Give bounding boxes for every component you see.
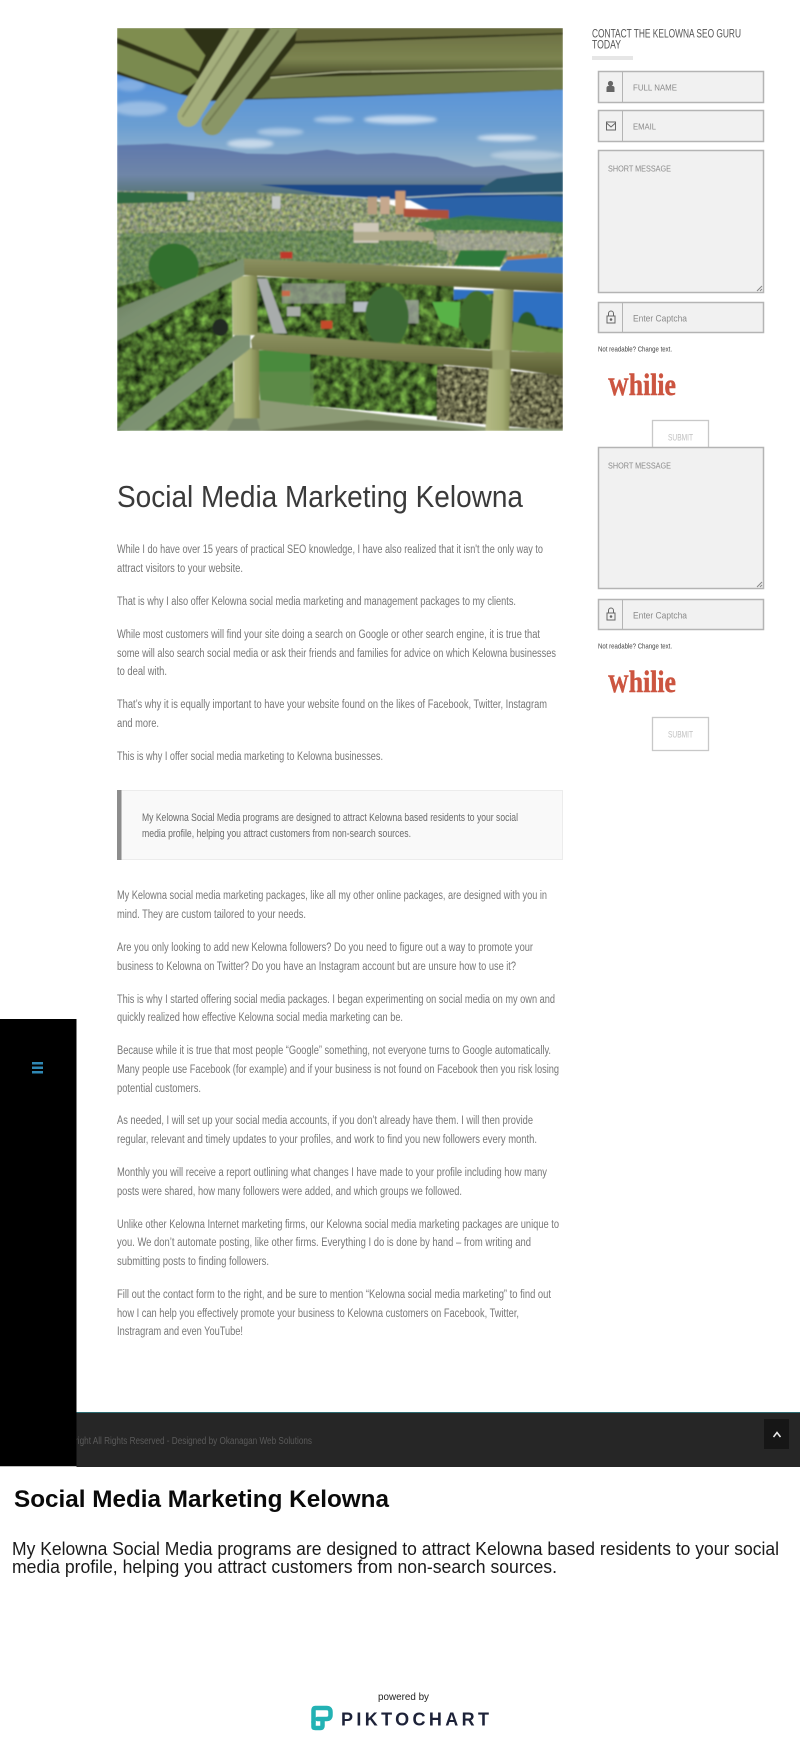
field: short message: [598, 150, 764, 292]
callout: blockquote: [117, 790, 562, 860]
roof top beam: [295, 28, 563, 41]
captcha image: Whilie: [608, 367, 676, 402]
icon: envelope: [606, 122, 616, 130]
field: short message repeat: [598, 448, 764, 588]
far mountains: [117, 144, 563, 200]
left top rail: [117, 258, 244, 341]
body paragraphs: Are you only looking to add new Kelowna followers? Do you need to figure out a way to promote your: [117, 942, 533, 954]
left lower rail: [117, 335, 250, 431]
body paragraphs: mind. They are custom tailored to your needs.: [117, 909, 306, 921]
neighbourhood and trees centre: [257, 277, 563, 357]
icon: lock repeat: [607, 608, 615, 620]
sidebar: contact form: [592, 28, 764, 750]
intro paragraphs: That is why I also offer Kelowna social media marketing and management packages to my clients.: [117, 596, 516, 608]
houses: [149, 243, 563, 353]
field: full name: FULL NAME: [633, 82, 677, 92]
intro paragraphs: attract visitors to your website.: [117, 563, 243, 575]
downtown towers: [188, 191, 449, 219]
body paragraphs: business to Kelowna on Twitter? Do you have an Instagram account but are unsure how to use it?: [117, 961, 516, 973]
roof lower log: [252, 70, 563, 99]
body paragraphs: quickly realized how effective Kelowna social media marketing can be.: [117, 1012, 403, 1024]
left railing post: [232, 275, 260, 418]
rear mid rail: [251, 333, 563, 376]
clouds: [114, 79, 564, 160]
lower description: [12, 1538, 779, 1577]
body paragraphs: [117, 890, 559, 1338]
body paragraphs: Fill out the contact form to the right, and be sure to mention “Kelowna social media marketing” to find out: [117, 1289, 552, 1301]
icon: menu: [32, 1062, 43, 1074]
field: short message repeat: SHORT MESSAGE: [608, 460, 671, 470]
logo wordmark: PIKTOCHART: [341, 1710, 489, 1730]
intro paragraphs: This is why I offer social media marketing to Kelowna businesses.: [117, 751, 383, 763]
intro paragraphs: to deal with.: [117, 666, 167, 678]
title underline: [592, 56, 633, 60]
main heading: Social Media Marketing Kelowna: [117, 479, 524, 514]
submit button repeat: SUBMIT: [668, 730, 693, 740]
roof left log lower: [117, 44, 199, 94]
intro paragraphs: That’s why it is equally important to have your website found on the likes of Facebook, Twitter, Instagram: [117, 699, 547, 711]
body paragraphs: you. We don’t automate posting, like other firms. Everything I do is done by hand – from writing and: [117, 1237, 531, 1249]
photo: Kelowna view from lookout: [117, 28, 563, 431]
body paragraphs: As needed, I will set up your social media accounts, if you don’t already have them. I will then provide: [117, 1115, 533, 1127]
intro paragraphs: some will also search social media or ask their friends and families for advice on which Kelowna businesses: [117, 648, 556, 660]
powered by credit: [314, 1691, 489, 1730]
town tree belts: [117, 192, 563, 287]
intro paragraphs: and more.: [117, 718, 159, 730]
submit button: SUBMIT: [668, 432, 693, 442]
site footer bar: [0, 1412, 800, 1467]
dry hillside scrub: [437, 365, 563, 431]
bay water behind railing: [500, 257, 563, 277]
intro paragraphs: [117, 544, 556, 763]
deck boards: [206, 400, 563, 431]
callout: blockquote: My Kelowna Social Media programs are designed to attract Kelowna based residents to your social: [142, 812, 518, 824]
lawn shading: [257, 372, 314, 405]
field: captcha repeat: [598, 600, 764, 630]
intro paragraphs: While most customers will find your site doing a search on Google or other search engine, it is true that: [117, 629, 541, 641]
tree belt far: [117, 192, 190, 204]
body paragraphs: potential customers.: [117, 1083, 201, 1095]
roof: [117, 20, 563, 125]
lawn and lower trees: [257, 348, 444, 418]
diagonal log front: [188, 20, 247, 116]
lower description: media profile, helping you attract customers from non-search sources.: [12, 1556, 557, 1577]
lower title: Social Media Marketing Kelowna: [14, 1486, 390, 1513]
submit button: [652, 420, 708, 454]
powered by credit: powered by: [378, 1691, 430, 1703]
field: captcha repeat: Enter Captcha: [633, 610, 687, 620]
captcha image repeat: Whilie: [608, 664, 676, 699]
back to top button: [764, 1419, 789, 1449]
body paragraphs: Monthly you will receive a report outlining what changes I have made to your profile including how many: [117, 1167, 547, 1179]
icon: lock: [607, 311, 615, 323]
body paragraphs: Instragram and even YouTube!: [117, 1326, 243, 1338]
copyright text: Copyright All Rights Reserved - Designed by Okanagan Web Solutions: [56, 1436, 312, 1447]
icon: person: [606, 81, 614, 92]
captcha help link repeat: Not readable? Change text.: [598, 642, 672, 650]
field: email: [598, 110, 764, 142]
intro paragraphs: While I do have over 15 years of practical SEO knowledge, I have also realized that it isn't the only way to: [117, 544, 543, 556]
sky: [117, 67, 563, 200]
icon: piktochart mark: [314, 1708, 330, 1728]
left black side panel: [0, 1019, 76, 1467]
body paragraphs: This is why I started offering social media packages. I began experimenting on social media on my own and: [117, 994, 555, 1006]
body paragraphs: Because while it is true that most people “Google” something, not everyone turns to Google automatically.: [117, 1045, 551, 1057]
town: [117, 190, 563, 313]
body paragraphs: Many people use Facebook (for example) and if your business is not found on Facebook then you risk losing: [117, 1064, 559, 1076]
body paragraphs: Unlike other Kelowna Internet marketing firms, our Kelowna social media marketing packages are unique to: [117, 1219, 559, 1231]
trees left: [117, 257, 237, 431]
rear top rail: [244, 258, 563, 293]
callout: blockquote: media profile, helping you attract customers from non-search sources.: [142, 828, 411, 840]
diagonal log rear: [212, 20, 290, 124]
body paragraphs: posts were shared, how many followers were added, and which groups we followed.: [117, 1186, 462, 1198]
sidebar title: [592, 28, 741, 52]
right railing post: [485, 289, 514, 431]
sidebar title: TODAY: [592, 40, 621, 52]
lower trees: [310, 353, 444, 420]
field: captcha: Enter Captcha: [633, 314, 687, 324]
body paragraphs: how I can help you effectively promote your business to Kelowna customers on Facebook, Twitter,: [117, 1308, 519, 1320]
right headland: [480, 172, 563, 197]
lower description: My Kelowna Social Media programs are designed to attract Kelowna based residents to your social: [12, 1538, 779, 1559]
field: short message: SHORT MESSAGE: [608, 164, 671, 174]
bridge: [406, 193, 563, 198]
roof shadow base: [117, 28, 563, 101]
sidebar title: CONTACT THE KELOWNA SEO GURU: [592, 28, 741, 40]
captcha help link: Not readable? Change text.: [598, 344, 672, 354]
roof left log upper: [117, 28, 205, 71]
field: full name: [598, 72, 764, 102]
body paragraphs: My Kelowna social media marketing packages, like all my other online packages, are designed with you in: [117, 890, 547, 902]
lake upper: [260, 185, 563, 223]
submit button repeat: [652, 718, 708, 750]
roof main log: [270, 34, 563, 75]
body paragraphs: submitting posts to finding followers.: [117, 1256, 269, 1268]
body paragraphs: regular, relevant and timely updates to your profiles, and work to find you new followers every month.: [117, 1134, 537, 1146]
field: email: EMAIL: [633, 122, 656, 132]
lake lower right: [407, 195, 563, 223]
field: captcha: [598, 302, 764, 332]
